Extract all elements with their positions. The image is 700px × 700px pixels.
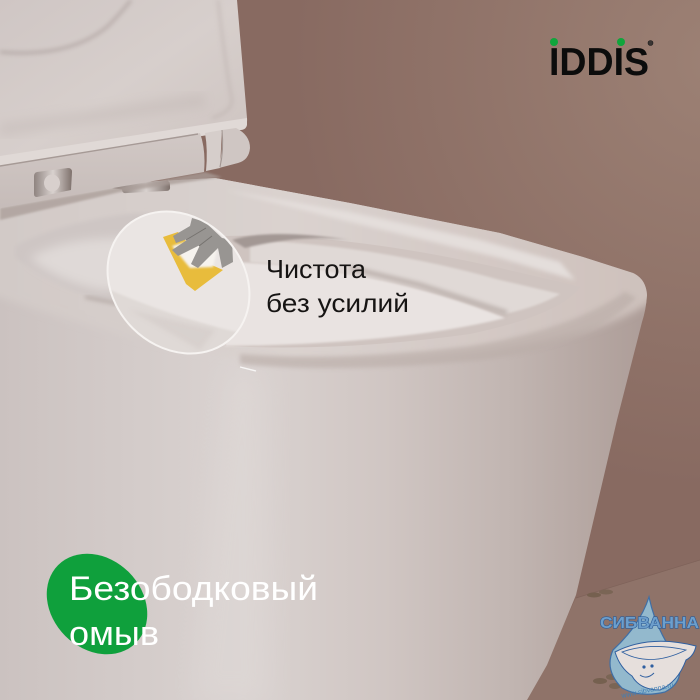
watermark: Sibvanna: www.sibvanna.ru [620,682,674,700]
watermark: Sibvanna: СИБВАННА [600,615,699,632]
vertical highlight on body [190,375,270,700]
lens outline [79,183,278,382]
hinge button [34,168,72,197]
rim top surface [0,178,647,352]
bowl floor right [225,262,505,346]
lid glare [0,100,205,130]
bowl inner wall [250,240,560,314]
floor [527,560,700,700]
rim outer shading [240,292,636,368]
heading: омыв [69,615,159,653]
sponge [163,232,223,291]
callout text [266,254,409,318]
lid recess [0,0,131,53]
shadow under seat [0,172,222,220]
lid right inner edge [212,0,232,118]
basin light [34,238,115,291]
logo: IDDIS: IDDIS [549,41,649,84]
rim highlight band [276,200,573,280]
bowl back shadow [232,234,350,248]
lens callout [106,210,250,354]
rim highlight on front [240,367,256,371]
toilet body [0,170,700,700]
green blob [26,533,168,675]
glove [172,218,233,268]
chrome fitting under hinge [105,178,170,193]
basin lower edge [85,297,125,305]
wall grey stripe [350,268,507,313]
bowl left basin [130,218,131,219]
lid bottom edge [0,118,247,166]
seat hinge bar [0,128,250,208]
callout text: без усилий [266,288,409,318]
heading [69,570,318,653]
bowl opening [225,236,417,348]
heading: Безободковый [69,570,318,608]
raised lid [0,0,247,168]
callout text: Чистота [266,254,367,284]
watermark: Sibvanna [600,597,699,700]
